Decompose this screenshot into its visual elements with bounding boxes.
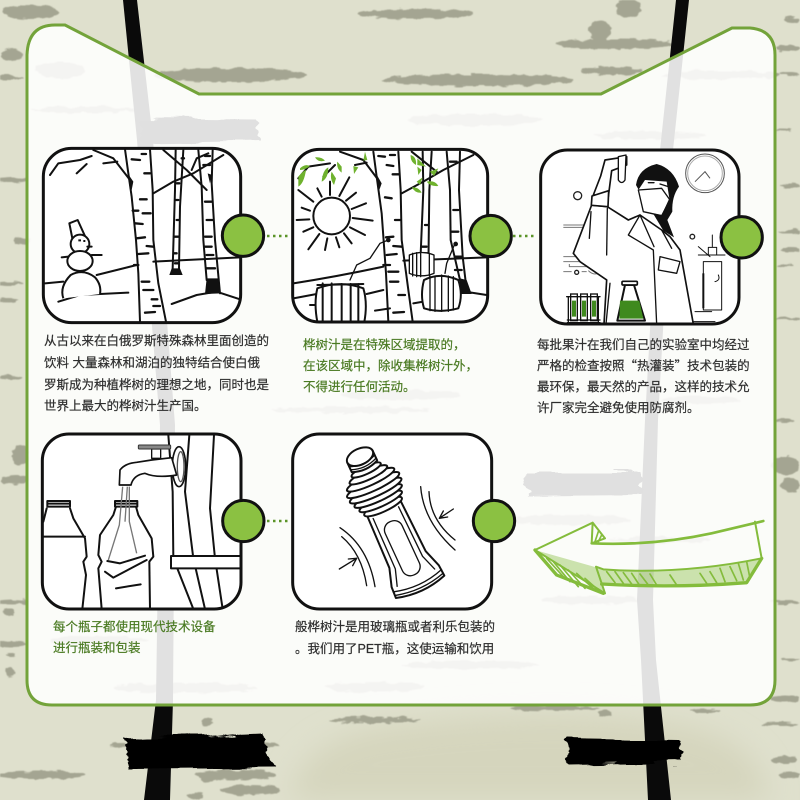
step marker 2 <box>470 215 511 257</box>
text: forest description: 罗斯成为种植桦树的理想之地，同时也是 <box>44 377 270 392</box>
text: quality control: 每批果汁在我们自己的实验室中均经过 <box>537 337 750 352</box>
connector dots 1 <box>267 235 288 237</box>
text: packaging <box>295 619 495 656</box>
text: forest description: 从古以来在白俄罗斯特殊森林里面创造的 <box>44 333 269 348</box>
text: forest description: 饮料 大量森林和湖泊的独特结合使白俄 <box>44 355 260 370</box>
text: extraction zone: 在该区域中，除收集桦树汁外， <box>303 358 478 373</box>
panel 5: PET bottle <box>293 434 515 609</box>
panel 4: bottling tap <box>42 434 264 609</box>
text: bottling <box>53 619 216 655</box>
panel 1: snowy birch forest <box>43 148 264 323</box>
text: extraction zone <box>303 337 478 394</box>
main card <box>27 25 775 705</box>
illustration: tap and bottles <box>43 435 243 609</box>
panel 3: laboratory scientist <box>541 150 762 324</box>
step marker 5 <box>473 500 515 542</box>
connector dots 2 <box>513 235 535 237</box>
text: forest description <box>44 333 270 413</box>
panel 2: sap collection <box>293 149 511 327</box>
text: packaging: 般桦树汁是用玻璃瓶或者利乐包装的 <box>295 619 495 634</box>
text: quality control <box>537 337 750 415</box>
illustration: sun, trees and barrels <box>293 152 487 327</box>
illustration: trees and snowman <box>45 149 240 322</box>
illustration: scientist with flask <box>563 154 725 324</box>
step marker 4 <box>223 500 264 542</box>
text: bottling: 每个瓶子都使用现代技术设备 <box>53 619 216 634</box>
step marker 3 <box>721 217 762 258</box>
illustration: tilted PET bottle with arrows <box>338 446 456 599</box>
text: packaging: 。我们用了PET瓶，这使运输和饮用 <box>295 641 494 656</box>
black hanging straps <box>123 0 689 800</box>
connector dots 4 <box>267 520 289 522</box>
text: quality control: 严格的检查按照“热灌装”技术包装的 <box>537 355 750 374</box>
sketched green arrow pointing left <box>535 521 763 593</box>
text: forest description: 世界上最大的桦树汁生产国。 <box>44 398 207 413</box>
text: quality control: 最环保，最天然的产品，这样的技术允 <box>537 379 750 394</box>
text: bottling: 进行瓶装和包装 <box>53 641 141 655</box>
text: extraction zone: 不得进行任何活动。 <box>303 379 416 394</box>
text: quality control: 许厂家完全避免使用防腐剂。 <box>537 400 700 415</box>
text: extraction zone: 桦树汁是在特殊区域提取的， <box>303 337 466 352</box>
step marker 1 <box>222 215 264 256</box>
